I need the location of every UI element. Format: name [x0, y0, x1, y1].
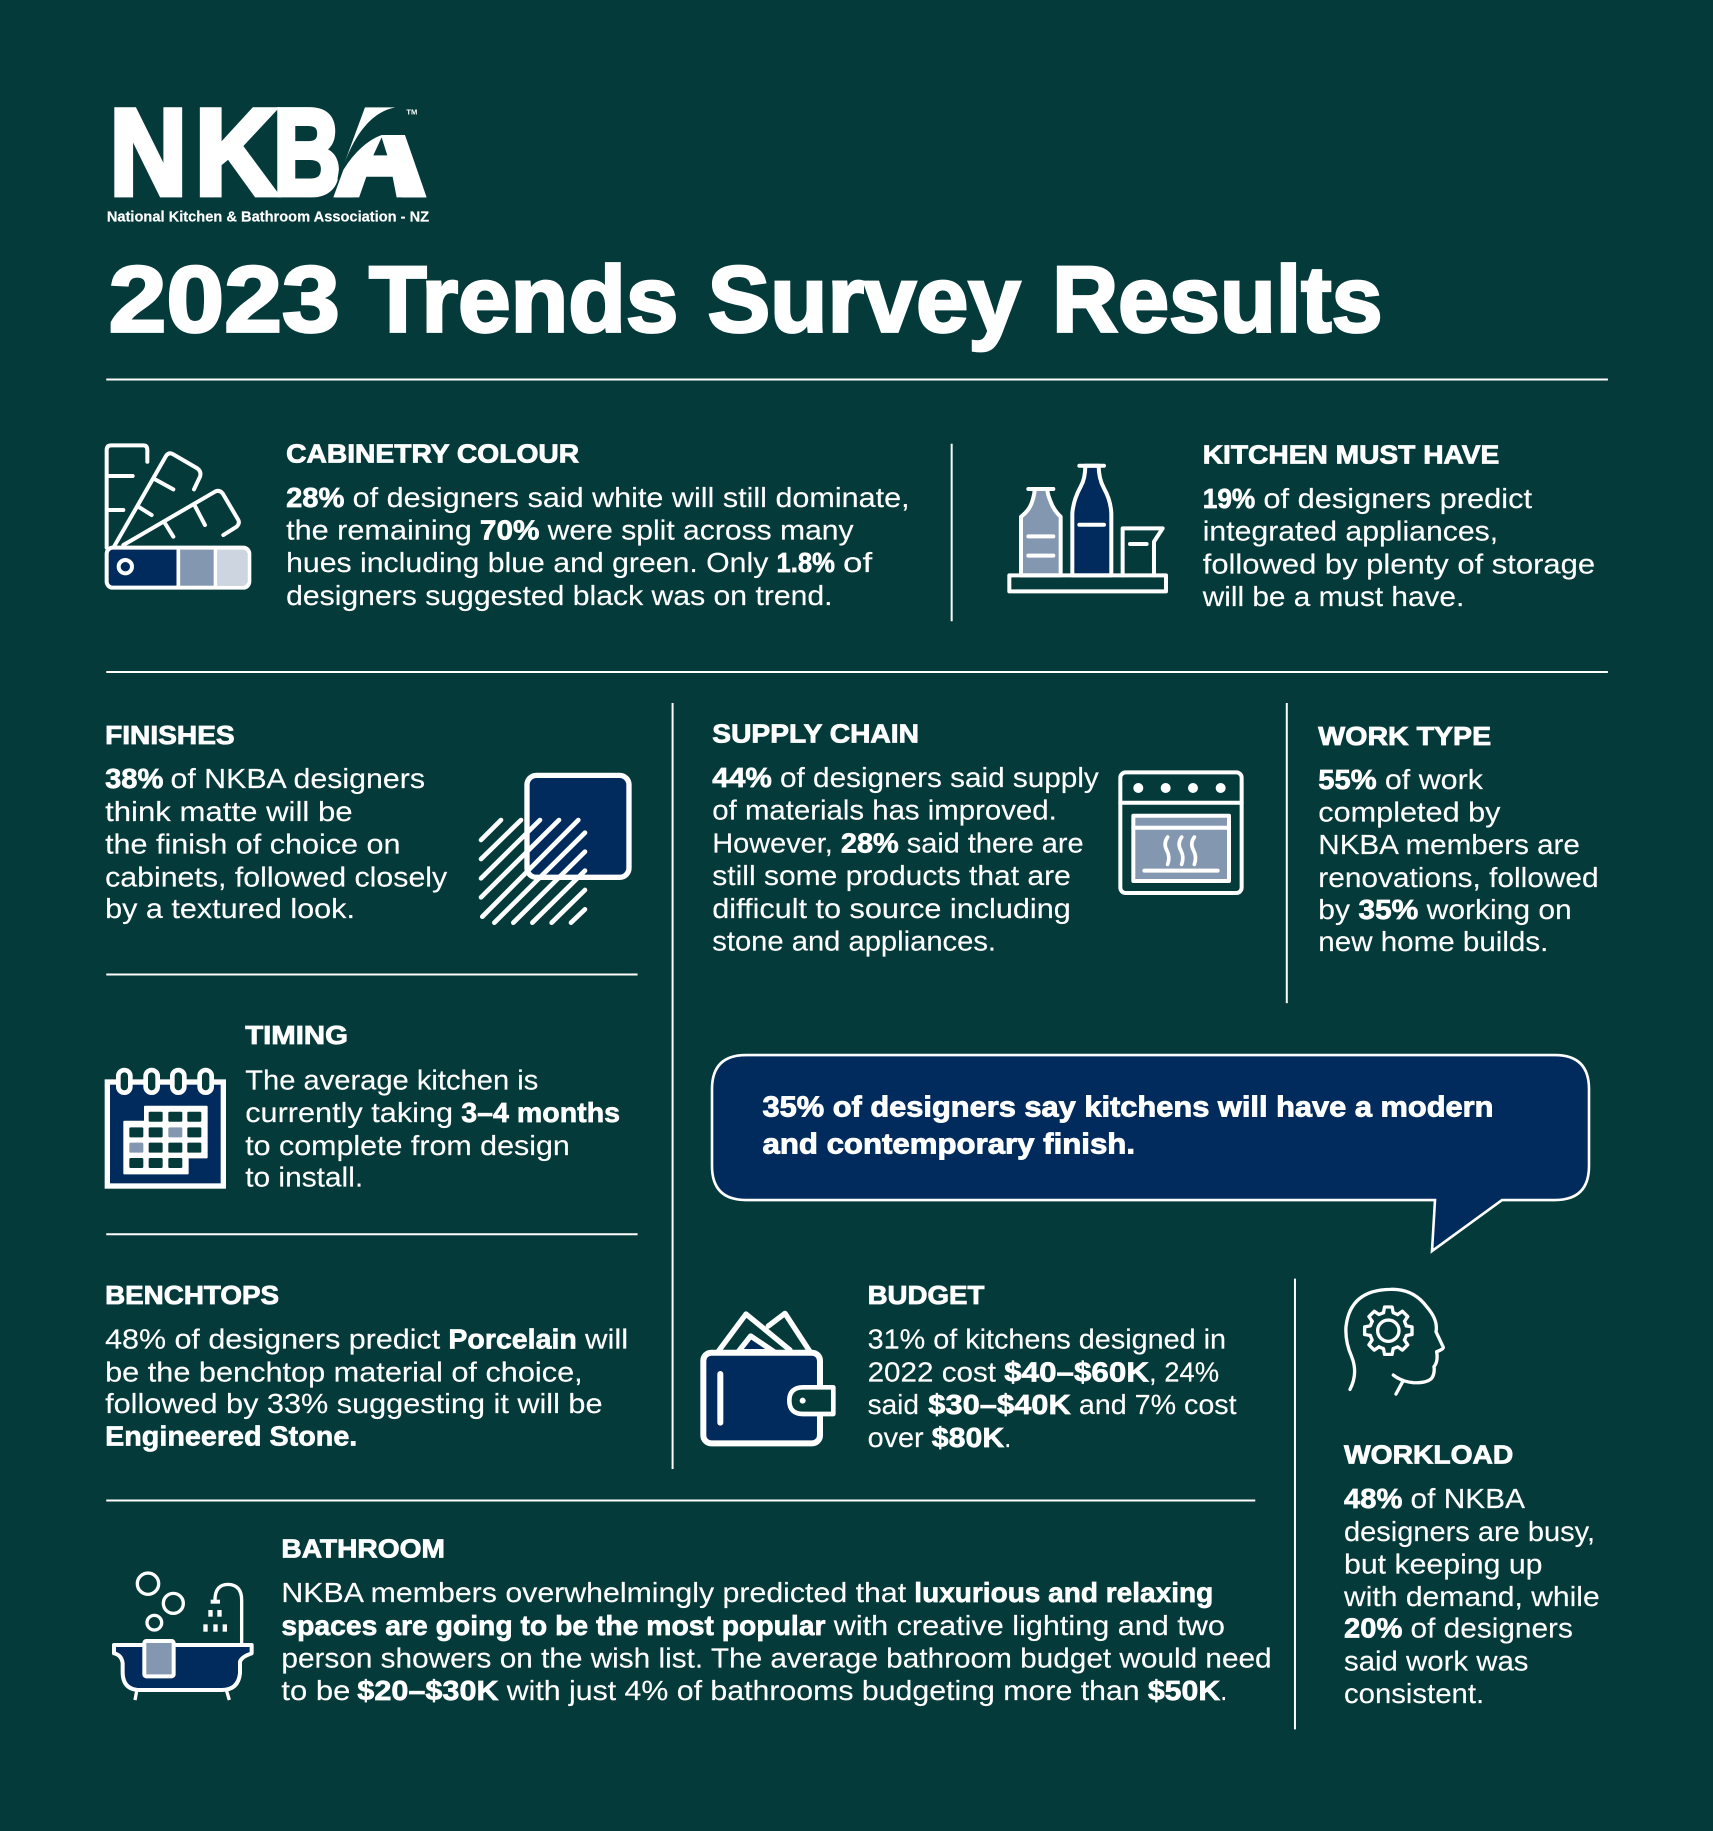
text block: renovations, followed: [1318, 862, 1599, 893]
text block: .: [1220, 1675, 1227, 1706]
text block: and 7% cost: [1079, 1389, 1237, 1420]
text block: of designers said white will still dominate,: [353, 482, 910, 513]
logo: NKBA: National Kitchen & Bathroom Association - NZ: [107, 209, 429, 225]
text block: $50K: [1148, 1675, 1220, 1706]
text block: integrated appliances,: [1203, 516, 1498, 547]
heading: BUDGET: [868, 1280, 984, 1310]
panel: supply chain: [712, 719, 1242, 957]
title: Survey: [708, 247, 1021, 352]
text block: .: [1004, 1422, 1011, 1453]
text block: difficult to source including: [712, 893, 1071, 924]
text block: 2022 cost: [868, 1356, 996, 1387]
heading: TIMING: [245, 1020, 348, 1050]
text block: of: [843, 547, 873, 578]
text block: [1202, 483, 1595, 612]
text block: followed by 33% suggesting it will be: [105, 1388, 603, 1419]
text block: with demand, while: [1343, 1581, 1600, 1612]
text block: 48%: [1344, 1483, 1402, 1514]
text block: $40–$60K: [1004, 1356, 1149, 1387]
text block: followed by plenty of storage: [1203, 548, 1595, 579]
callout: speech bubble: [712, 1055, 1589, 1251]
text block: 38%: [105, 763, 164, 794]
text block: [1318, 764, 1599, 957]
text block: cabinets, followed closely: [105, 861, 447, 892]
panel: bathroom: [114, 1534, 1272, 1706]
panel: cabinetry colour: [107, 438, 910, 611]
text block: 31% of kitchens designed in: [868, 1324, 1226, 1355]
text block: 48% of designers predict: [105, 1324, 440, 1355]
text block: , 24%: [1149, 1356, 1219, 1387]
text block: 44%: [712, 762, 772, 793]
text block: 70%: [480, 515, 540, 546]
text block: hues including blue and green. Only: [286, 547, 768, 578]
heading: FINISHES: [105, 720, 235, 750]
text block: designers suggested black was on trend.: [286, 580, 833, 611]
icon: colour swatch fan: [107, 445, 249, 588]
heading: BENCHTOPS: [105, 1280, 279, 1310]
text block: by a textured look.: [105, 893, 355, 924]
logo: NKBA: B: [273, 83, 341, 220]
text block: 55%: [1318, 764, 1377, 795]
text block: NKBA members overwhelmingly predicted that: [281, 1577, 906, 1608]
text block: [712, 762, 1099, 957]
title: 2023: [109, 247, 340, 352]
text block: to complete from design: [245, 1130, 570, 1161]
text block: of NKBA: [1411, 1483, 1525, 1514]
text block: 28%: [286, 482, 345, 513]
text block: will: [584, 1324, 628, 1355]
text block: $20–$30K: [357, 1675, 499, 1706]
text block: to install.: [245, 1161, 363, 1192]
text block: said work was: [1344, 1645, 1529, 1676]
text block: of designers said supply: [780, 762, 1099, 793]
callout: speech bubble: 35% of designers say kitchens will have a modern: [763, 1091, 1493, 1123]
text block: [868, 1324, 1237, 1453]
text block: $30–$40K: [928, 1389, 1071, 1420]
panel: timing: [107, 1020, 620, 1192]
text block: [286, 482, 910, 611]
text block: 19%: [1203, 483, 1255, 514]
heading: WORKLOAD: [1344, 1440, 1513, 1470]
title: Trends: [369, 247, 678, 352]
text block: [281, 1577, 1272, 1706]
text block: were split across many: [547, 515, 854, 546]
panel: benchtops: [105, 1280, 628, 1452]
icon: head with gear: [1346, 1289, 1443, 1394]
title: Results: [1052, 247, 1383, 352]
text block: of designers predict: [1263, 483, 1532, 514]
text block: 1.8%: [777, 547, 835, 578]
text block: of work: [1385, 764, 1484, 795]
text block: [105, 1324, 628, 1452]
icon: oven: [1120, 772, 1242, 893]
panel: workload: [1343, 1289, 1600, 1709]
panel: work type: [1318, 721, 1599, 957]
text block: of materials has improved.: [712, 795, 1057, 826]
text block: with creative lighting and two: [833, 1610, 1225, 1641]
text block: the finish of choice on: [105, 829, 401, 860]
text block: spaces are going to be the most popular: [281, 1610, 826, 1641]
title: [109, 247, 1383, 352]
text block: luxurious and relaxing: [914, 1577, 1213, 1608]
panel: budget: [703, 1280, 1237, 1453]
icon: finish swatch with hatching: [481, 775, 629, 923]
text block: $80K: [932, 1422, 1004, 1453]
text block: will be a must have.: [1202, 581, 1464, 612]
text block: by 35% working on: [1318, 894, 1572, 925]
text block: completed by: [1318, 797, 1500, 828]
text block: 20%: [1344, 1613, 1402, 1644]
text block: over: [868, 1422, 924, 1453]
heading: KITCHEN MUST HAVE: [1203, 440, 1499, 470]
text block: said: [868, 1389, 919, 1420]
heading: SUPPLY CHAIN: [712, 719, 919, 749]
text block: NKBA members are: [1318, 829, 1580, 860]
text block: of NKBA designers: [170, 763, 425, 794]
text block: of designers: [1411, 1613, 1573, 1644]
logo: NKBA: N: [110, 83, 187, 220]
heading: WORK TYPE: [1318, 721, 1491, 751]
icon: wallet: [703, 1313, 833, 1443]
text block: think matte will be: [105, 796, 353, 827]
heading: BATHROOM: [281, 1534, 445, 1564]
logo: NKBA: K: [195, 83, 277, 220]
text block: [1343, 1483, 1600, 1709]
callout: speech bubble: and contemporary finish.: [763, 1129, 1135, 1161]
text block: [105, 763, 447, 924]
text block: stone and appliances.: [712, 926, 996, 957]
text block: person showers on the wish list. The average bathroom budget would need: [281, 1642, 1272, 1673]
text block: new home builds.: [1318, 926, 1548, 957]
icon: calendar: [107, 1070, 223, 1186]
text block: to be: [281, 1675, 350, 1706]
text block: with just 4% of bathrooms budgeting more than: [506, 1675, 1140, 1706]
logo: NKBA: [107, 83, 429, 225]
text block: consistent.: [1344, 1678, 1484, 1709]
text block: 3–4 months: [461, 1097, 620, 1128]
text block: Engineered Stone.: [105, 1421, 357, 1452]
text block: the remaining: [286, 515, 472, 546]
icon: bottles on a shelf: [1009, 466, 1166, 591]
panel: finishes: [105, 720, 629, 924]
text block: be the benchtop material of choice,: [105, 1356, 583, 1387]
text block: designers are busy,: [1344, 1516, 1595, 1547]
icon: bathtub and shower: [114, 1573, 252, 1700]
text block: Porcelain: [448, 1324, 577, 1355]
logo: NKBA: A: [336, 83, 425, 220]
heading: CABINETRY COLOUR: [286, 438, 579, 468]
text block: still some products that are: [712, 860, 1071, 891]
text block: However, 28% said there are: [712, 827, 1084, 858]
text block: currently taking: [245, 1097, 453, 1128]
panel: kitchen must have: [1009, 440, 1595, 612]
text block: but keeping up: [1344, 1548, 1543, 1579]
text block: The average kitchen is: [245, 1064, 538, 1095]
text block: [245, 1064, 620, 1192]
logo: NKBA: TM: [406, 107, 417, 116]
